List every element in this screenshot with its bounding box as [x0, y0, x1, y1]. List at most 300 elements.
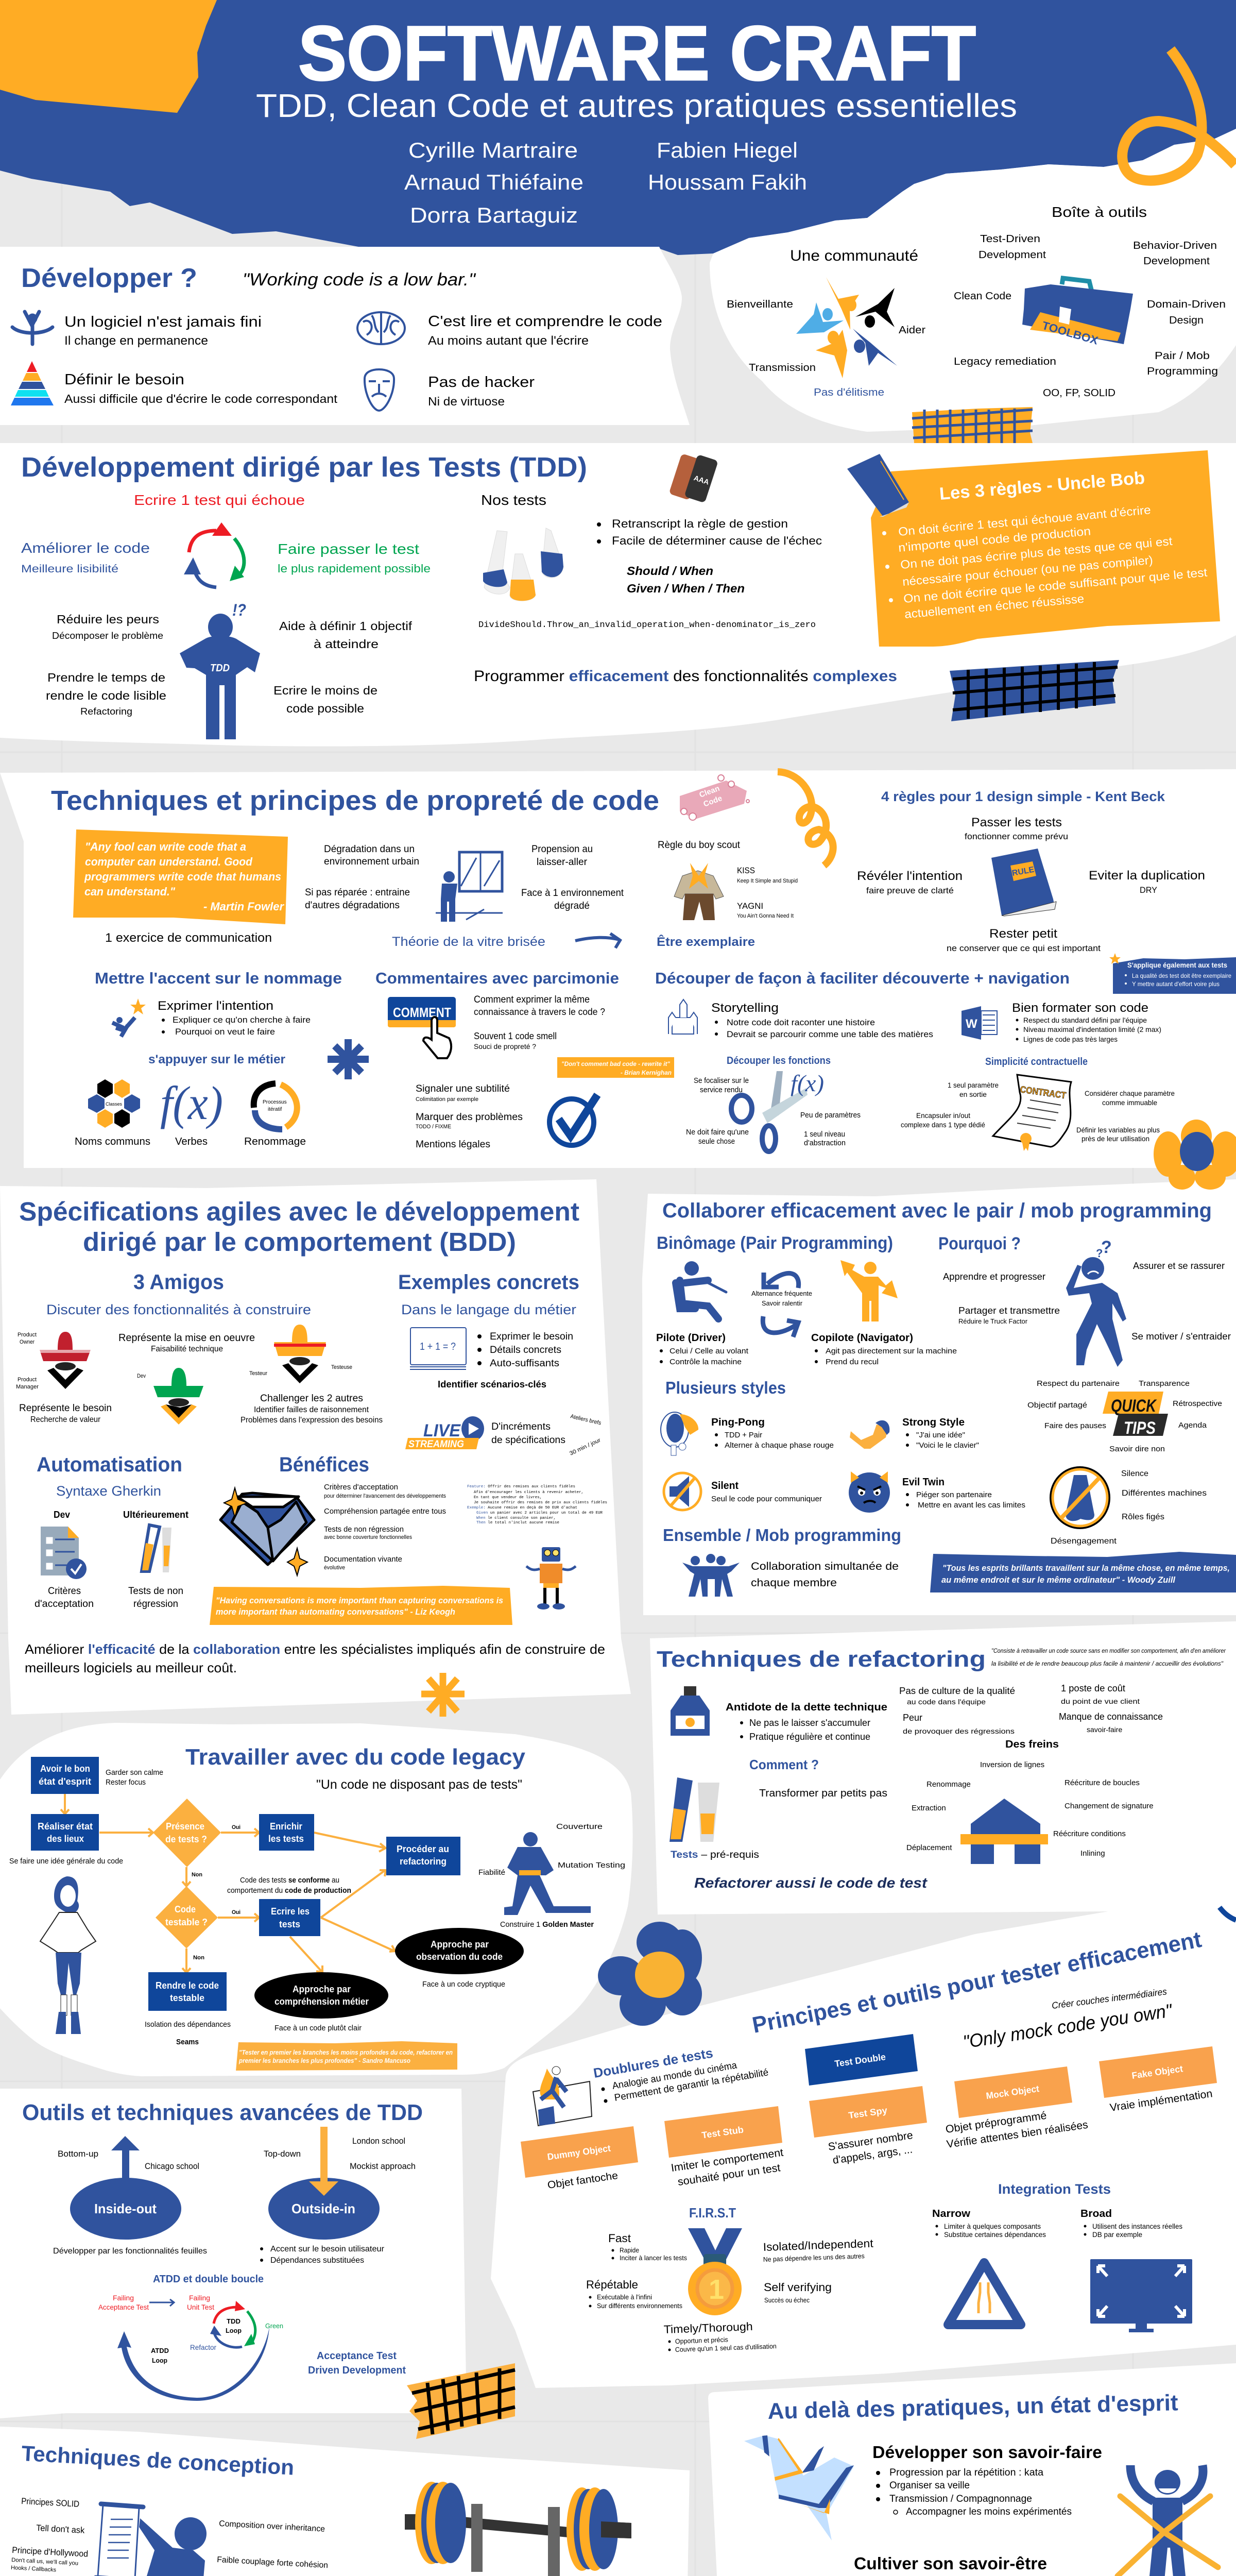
code sample: gherkin: Given un panier avec 2 articles pour un total de 49 EUR [476, 1511, 603, 1515]
pourquoi: Apprendre et progresser [943, 1272, 1045, 1282]
sub-headings: Commentaires avec parcimonie [375, 969, 619, 987]
callout: 3 rules [847, 450, 1220, 647]
white panel background [0, 443, 1236, 747]
heading [19, 1197, 579, 1257]
broken window theory: Être exemplaire [657, 935, 755, 949]
antidote notes [726, 1702, 887, 1742]
icon: driver [676, 1261, 726, 1319]
icon: checklist [41, 1527, 87, 1579]
boy scout rule: YAGNI [737, 901, 763, 911]
rule list: On doit écrire 1 test qui échoue avant d'écrire [898, 503, 1152, 538]
icon: whiteboard [410, 1328, 466, 1369]
community values: Aider [899, 325, 925, 336]
approach: observation: observation du code [416, 1952, 503, 1962]
decoration: blue flower [598, 1922, 702, 2026]
quick tips: Rétrospective [1173, 1399, 1222, 1408]
callout: Brian Kernighan: - Brian Kernighan [621, 1069, 672, 1076]
panel: legacy code [0, 1723, 633, 2076]
approach: compréhension: Approche par [293, 1984, 351, 1994]
icon: origami bird [744, 2435, 854, 2540]
icon: narrow road sign [948, 2263, 1021, 2325]
toolbox topics: OO, FP, SOLID [1043, 387, 1115, 399]
callout: Martin Fowler [73, 829, 288, 924]
styles: Mettre en avant les cas limites [918, 1501, 1025, 1510]
binômage: Pilote (Driver) [656, 1332, 726, 1344]
savoir-faire: Développer son savoir-faire [872, 2443, 1102, 2462]
callout: also applies to tests: Y mettre autant d'effort voire plus [1132, 980, 1220, 988]
how to: Transformer par petits pas [759, 1788, 887, 1799]
header band [0, 0, 1236, 255]
item: lire et comprendre: Au moins autant que l'écrire [428, 334, 589, 348]
3 amigos [16, 1270, 383, 1425]
sub-headings [95, 969, 1070, 987]
inside-out: Bottom-up [58, 2149, 98, 2159]
white panel background [0, 2427, 690, 2576]
benefits: Compréhension partagée entre tous [324, 1507, 446, 1516]
refactor phase [21, 540, 150, 575]
test doubles: Doublures de tests [592, 2045, 714, 2081]
icon: test tubes [142, 1525, 171, 1572]
icon: woman developer [40, 1876, 96, 2034]
icon: medal [688, 2228, 742, 2315]
simple design rules: DRY [1140, 885, 1157, 895]
icon: man with scroll [96, 2504, 209, 2576]
styles: Plusieurs styles [665, 1378, 786, 1397]
simple design rules: Rester petit [989, 927, 1057, 941]
panel: conception [0, 2427, 690, 2576]
label: d'appels, args, ... [832, 2143, 913, 2166]
decoration: orange black tape [407, 2363, 515, 2439]
icon: brain [357, 312, 405, 344]
icon: diamond [220, 1493, 314, 1565]
step: bon état d'esprit [31, 1757, 99, 1794]
label [827, 2129, 914, 2166]
branch labels: Non [193, 1955, 204, 1961]
note: comportement du code de production [227, 1886, 351, 1895]
step note: Se faire une idée générale du code [9, 1857, 123, 1866]
callout: also applies to tests: S'applique également aux tests [1127, 961, 1227, 969]
panel: refactoring [650, 1621, 1236, 1914]
white panel background [0, 1179, 631, 1715]
ATDD label: Acceptance Test [317, 2350, 397, 2362]
code sample: gherkin: When le client consulte son panier, [476, 1516, 556, 1520]
antidote notes: Ne pas le laisser s'accumuler [749, 1718, 870, 1728]
arrow [309, 2127, 338, 2196]
broken window notes [305, 844, 624, 911]
step: état des lieux: des lieux [47, 1834, 84, 1844]
label: Imiter le comportement [670, 2147, 784, 2174]
authors: Fabien Hiegel [657, 138, 798, 162]
pourquoi: Assurer et se rassurer [1133, 1261, 1225, 1271]
heading: dirigé par le comportement (BDD) [83, 1227, 516, 1257]
white panel background [650, 1621, 1236, 1914]
boy scout rule [658, 840, 798, 919]
broken window notes: Face à 1 environnement [521, 888, 624, 899]
toolbox topics [954, 233, 1226, 399]
summary text: Améliorer l'efficacité de la collaboration entre les spécialistes impliqués afin de construire de [25, 1641, 605, 1657]
icon: renaming cycle: Processus [263, 1099, 287, 1105]
toolbox topics: Pair / Mob [1155, 350, 1210, 362]
white panel background [0, 769, 1236, 1168]
splitting section: Storytelling [711, 1001, 779, 1015]
item: pas de hacker [365, 369, 535, 411]
heading: Techniques de refactoring [657, 1647, 986, 1672]
styles: Piéger son partenaire [916, 1490, 992, 1499]
icon: comment button: COMMENT [393, 1005, 451, 1020]
note [145, 2020, 231, 2046]
step: état des lieux: Réaliser état [38, 1821, 93, 1832]
pourquoi [938, 1234, 1231, 1367]
contract notes [901, 1081, 1175, 1143]
code sample: gherkin: Exemple: Aucune remise en deçà de 50 EUR d'achat [467, 1506, 577, 1510]
mob programming: Ensemble / Mob programming [663, 1526, 901, 1545]
right notes [273, 619, 413, 715]
splitting section: Devrait se parcourir comme une table des matières [727, 1029, 933, 1039]
step note [106, 1768, 163, 1787]
icon: soap [680, 775, 749, 820]
callout: also applies to tests: La qualité des test doit être exemplaire [1132, 972, 1231, 979]
box: fake object: Fake Object [1131, 2063, 1183, 2081]
icon: forbidden nose [1052, 1468, 1108, 1527]
green phase: le plus rapidement possible [278, 562, 431, 575]
step note: Garder son calme [106, 1768, 163, 1777]
naming: business: s'appuyer sur le métier [148, 1053, 285, 1066]
label: S'assurer nombre [827, 2129, 914, 2153]
boy scout rule: You Ain't Gonna Need It [737, 913, 794, 919]
FIRST principles: Sur différents environnements [597, 2302, 682, 2310]
step: enrichir [259, 1814, 314, 1851]
icon: pyramid [11, 361, 54, 405]
FIRST principles: Fast [608, 2232, 631, 2245]
step: refactoring: Procéder au [397, 1844, 449, 1854]
comments section: TODO / FIXME [416, 1124, 451, 1130]
FIRST principles: Opportun et précis [675, 2335, 729, 2345]
examples: 30 min / jour [569, 1437, 602, 1457]
icon: runner at finish line [12, 312, 53, 344]
3 amigos: Problèmes dans l'expression des besoins [241, 1416, 383, 1425]
box: mock object [954, 2066, 1072, 2118]
right notes: à atteindre [314, 637, 379, 651]
icon: wide screen [1090, 2259, 1192, 2332]
box: dummy object: Dummy Object [546, 2143, 611, 2162]
simple design rules: fonctionner comme prévu [965, 832, 1068, 841]
icon: strong arm [850, 1420, 889, 1449]
binômage: Prend du recul [826, 1358, 879, 1366]
callout: Sandro Mancuso: "Tester en premier les branches les moins profondes du code, refactorer en [239, 2048, 453, 2056]
comments section [388, 994, 674, 1150]
item: définir le besoin: Définir le besoin [64, 371, 184, 388]
design principles left: Don't call us, we'll call you [11, 2557, 78, 2567]
item: logiciel jamais fini: Un logiciel n'est jamais fini [64, 314, 262, 330]
obstacles: 1 poste de coût [1061, 1683, 1125, 1693]
item: définir le besoin: Aussi difficile que d'écrire le code correspondant [64, 392, 338, 405]
icon: toolbox [1022, 278, 1133, 347]
FIRST principles: Ne pas dépendre les uns des autres [763, 2252, 865, 2263]
examples: D'incréments [491, 1421, 551, 1432]
comments section: Mentions légales [416, 1139, 490, 1150]
icon: soap: Clean [698, 784, 721, 800]
label: Objet fantoche [547, 2170, 619, 2191]
refactoring types: Déplacement [906, 1843, 952, 1852]
integration tests: Substitue certaines dépendances [944, 2230, 1046, 2239]
test naming notes: Facile de déterminer cause de l'échec [612, 534, 822, 547]
binômage: Agit pas directement sur la machine [826, 1347, 957, 1355]
callout: Brian Kernighan: "Don't comment bad code - rewrite it" [561, 1060, 670, 1067]
icon: toolbox: TOOLBOX [1041, 319, 1100, 347]
FIRST principles: Rapide [620, 2246, 639, 2254]
FIRST principles: Inciter à lancer les tests [620, 2254, 687, 2262]
quick tips: Transparence [1139, 1379, 1190, 1388]
obstacles: au code dans l'équipe [907, 1698, 986, 1706]
subtitle: TDD, Clean Code et autres pratiques essentielles [256, 87, 1017, 124]
obstacles [899, 1683, 1163, 1750]
decision: code testable: testable ? [165, 1917, 208, 1927]
splitting section: Bien formater son code [1012, 1001, 1148, 1015]
panel: principes et outils: "Only mock code you own" [962, 1999, 1175, 2053]
refactoring types [906, 1760, 1154, 1858]
broken window notes: laisser-aller [537, 857, 588, 868]
savoir-faire: Accompagner les moins expérimentés [906, 2506, 1072, 2517]
heading: Collaborer efficacement avec le pair / mob programming [662, 1199, 1212, 1222]
FIRST principles: Couvre qu'un 1 seul cas d'utilisation [675, 2342, 777, 2353]
benefits: pour déterminer l'avancement des développements [324, 1493, 446, 1499]
summary text: meilleurs logiciels au meilleur coût. [25, 1660, 237, 1675]
splitting section: Respect du standard défini par l'équipe [1023, 1016, 1147, 1024]
decoration: orange tape [912, 407, 1033, 443]
box: test stub [664, 2106, 782, 2158]
rule list: On ne doit écrire que le code suffisant pour que le test [903, 565, 1208, 605]
conclusion line: Programmer efficacement des fonctionnalités complexes [474, 668, 897, 685]
binômage: Savoir ralentir [762, 1299, 803, 1307]
FIRST principles: Timely/Thorough [663, 2320, 753, 2336]
captions: Noms communs [75, 1136, 150, 1147]
captions: Verbes [175, 1136, 208, 1147]
refactoring types: Inlining [1080, 1849, 1105, 1858]
box: test stub: Test Stub [701, 2124, 744, 2141]
chart: ATDD double loop: TDD [227, 2317, 241, 2325]
icon: figure with crossed brushes [1118, 2465, 1218, 2576]
icon: quick tips sign: QUICK [1111, 1396, 1157, 1416]
pourquoi: Réduire le Truck Factor [958, 1317, 1028, 1325]
examples [398, 1271, 602, 1457]
icon: thinking TDD figure: TDD [210, 663, 230, 674]
outside-in: Outside-in [291, 2201, 355, 2216]
green phase [278, 541, 431, 575]
styles: "J'ai une idée" [916, 1431, 965, 1439]
rule list [882, 503, 1208, 621]
icon: flasks [483, 528, 563, 601]
code sample: gherkin [467, 1485, 607, 1525]
arrow [111, 2136, 140, 2180]
item: pas de hacker: Ni de virtuose [428, 395, 505, 408]
left notes: Refactoring [80, 706, 132, 717]
broken window theory: Théorie de la vitre brisée [392, 935, 545, 949]
label: souhaité pour un test [677, 2162, 781, 2188]
FIRST principles [586, 2205, 873, 2353]
simple design rules: ne conserver que ce qui est important [947, 943, 1101, 953]
decoration: orange asterisk [421, 1673, 465, 1717]
callout: Martin Fowler: "Any fool can write code that a [85, 840, 246, 853]
icon: man at broken window [436, 852, 503, 922]
automatisation: régression [133, 1599, 178, 1609]
icon: barbell [405, 2482, 631, 2576]
left notes: Prendre le temps de [47, 671, 165, 684]
white panel background [0, 247, 690, 425]
3 amigos: Représente le besoin [19, 1403, 112, 1414]
arrows: alternate [763, 1273, 799, 1337]
automatisation: Automatisation [37, 1453, 182, 1476]
icon: rules book: RULES [1011, 865, 1040, 878]
decoration: orange spiral [778, 772, 833, 866]
caption: 1 exercice de communication [105, 931, 272, 945]
panel: community and toolbox [710, 129, 1236, 432]
decision: présence de tests: de tests ? [165, 1834, 207, 1844]
binômage: Copilote (Navigator) [811, 1332, 913, 1344]
mob programming: Collaboration simultanée de [751, 1561, 899, 1572]
rule list: n'importe quel code de production [898, 524, 1091, 554]
styles: Silent [711, 1480, 739, 1492]
function notes: 1 seul niveau [804, 1130, 845, 1139]
icon: test tubes [670, 1777, 719, 1842]
definition quote [991, 1647, 1226, 1667]
3 amigos: Discuter des fonctionnalités à construire [46, 1302, 311, 1317]
FIRST principles: Isolated/Independent [763, 2237, 873, 2253]
right notes: Ecrire le moins de [273, 684, 377, 697]
torn blue header shape [0, 0, 1236, 255]
panel: TDD [0, 443, 1236, 747]
comments section: Colimitation par exemple [416, 1096, 478, 1103]
icon: contract: CONTRACT [1019, 1084, 1067, 1100]
test naming notes: DivideShould.Throw_an_invalid_operation_when-denominator_is_zero [478, 620, 816, 630]
function notes: service rendu [700, 1086, 743, 1094]
authors: Houssam Fakih [648, 170, 807, 194]
design principles left: Tell don't ask [36, 2523, 85, 2535]
box: test spy: Test Spy [848, 2105, 888, 2121]
binômage: Binômage (Pair Programming) [657, 1233, 893, 1253]
automatisation: Tests de non [128, 1586, 183, 1597]
savoir-faire: Transmission / Compagnonnage [889, 2494, 1032, 2504]
quotes: Créer couches intermédiaires [1051, 1986, 1168, 2011]
chart: ATDD double loop: Loop [226, 2327, 242, 2334]
definition quote: la lisibilité et de le rendre beaucoup plus facile à maintenir / accueillir des évolutions" [991, 1660, 1224, 1667]
sub-headings: Mettre l'accent sur le nommage [95, 969, 342, 987]
outside-in [260, 2127, 416, 2265]
community values: Pas d'élitisme [814, 387, 884, 398]
savoir-être: Cultiver son savoir-être [854, 2554, 1047, 2573]
item: pas de hacker: Pas de hacker [428, 374, 535, 391]
heading: Principes et outils pour tester efficacement [750, 1927, 1204, 2038]
rule list: On ne doit pas écrire plus de tests que ce qui est [900, 534, 1173, 571]
TDD loop arrows [210, 2301, 255, 2347]
refactor phase: Meilleure lisibilité [21, 563, 118, 575]
quick tips: Savoir dire non [1109, 1445, 1165, 1453]
design principles right: Composition over inheritance [219, 2519, 325, 2534]
3 amigos: 3 Amigos [133, 1270, 224, 1294]
inside-out: Chicago school [145, 2161, 199, 2171]
callout: Martin Fowler: - Martin Fowler [203, 900, 284, 913]
icon: TDD cycle [184, 522, 244, 587]
community values: Transmission [749, 362, 816, 374]
chart: ATDD double loop: Failing [113, 2294, 134, 2302]
chart: ATDD double loop: ATDD et double boucle [153, 2274, 264, 2285]
step: rendre testable [148, 1972, 227, 2011]
test naming notes [478, 517, 822, 630]
right notes: code possible [286, 702, 364, 715]
flowchart [9, 1757, 524, 2046]
boy scout rule: KISS [737, 866, 755, 875]
item: logiciel jamais fini: Il change en permanence [64, 334, 208, 348]
broken window theory [392, 934, 755, 949]
obstacles: savoir-faire [1087, 1725, 1122, 1734]
comments section: connaissance à travers le code ? [474, 1007, 605, 1017]
contract notes: Considérer chaque paramètre [1085, 1089, 1175, 1097]
white panel background [0, 2089, 467, 2418]
icon: mute [664, 1473, 701, 1510]
refactor phase: Améliorer le code [21, 540, 150, 556]
function notes: d'abstraction [804, 1139, 846, 1147]
simple design rules [857, 789, 1205, 953]
approach: compréhension: compréhension métier [274, 1996, 369, 2007]
styles: Evil Twin [902, 1477, 945, 1488]
icon: live streaming: LIVE [423, 1421, 461, 1440]
design principles right: Faible couplage forte cohésion [217, 2555, 328, 2570]
refactoring types: Renommage [926, 1780, 971, 1789]
flow arrows [61, 1794, 395, 1973]
sub-headings: Découper de façon à faciliter découverte + navigation [655, 969, 1070, 987]
broken window notes: Propension au [531, 844, 593, 855]
branch labels: Non [192, 1872, 202, 1878]
authors [404, 138, 807, 227]
3 amigos: Recherche de valeur [30, 1415, 101, 1424]
code sample: gherkin: Feature: Offrir des remises aux clients fidèles [467, 1485, 575, 1489]
naming: intention: Exprimer l'intention [158, 999, 273, 1013]
obstacles: de provoquer des régressions [903, 1727, 1015, 1735]
step: refactoring: refactoring [400, 1856, 447, 1867]
styles: Alterner à chaque phase rouge [725, 1441, 834, 1450]
icon: soap: Code [702, 794, 724, 809]
icon: devil [849, 1471, 890, 1513]
callout: Martin Fowler: can understand." [84, 885, 176, 898]
box: test double: Test Double [834, 2052, 886, 2069]
box: mock object: Mock Object [985, 2083, 1040, 2101]
golden master [478, 1822, 625, 1929]
icon: blue tape [950, 660, 1119, 721]
icon: f(x): f(x) [160, 1077, 223, 1129]
rule list: nécessaire pour échouer (ou ne pas compiler) [902, 553, 1154, 588]
summary text [25, 1641, 605, 1675]
note: Isolation des dépendances [145, 2020, 231, 2029]
naming: intention [112, 998, 311, 1037]
3 amigos: Représente la mise en oeuvre [118, 1332, 255, 1344]
rule list: actuellement en échec réussisse [904, 592, 1085, 621]
icon: red sombrero [40, 1332, 91, 1389]
icon: contract [993, 1075, 1071, 1151]
obstacles: Peur [903, 1713, 922, 1723]
toolbox topics: Development [1143, 256, 1210, 267]
function notes: Se focaliser sur le [694, 1076, 749, 1085]
examples: Détails concrets [490, 1345, 561, 1355]
icon: orange sombrero [274, 1325, 326, 1383]
refactoring types: Inversion de lignes [980, 1760, 1044, 1769]
toolbox topics: Behavior-Driven [1133, 240, 1217, 251]
authors: Dorra Bartaguiz [410, 203, 578, 227]
label: Vraie implémentation [1109, 2088, 1213, 2114]
definition: "Un code ne disposant pas de tests" [316, 1777, 522, 1792]
callout: also applies to tests [1109, 953, 1236, 994]
quick tips: Désengagement [1051, 1537, 1117, 1546]
toolbox topics: Programming [1147, 366, 1218, 377]
obstacles: Des freins [1005, 1739, 1059, 1750]
